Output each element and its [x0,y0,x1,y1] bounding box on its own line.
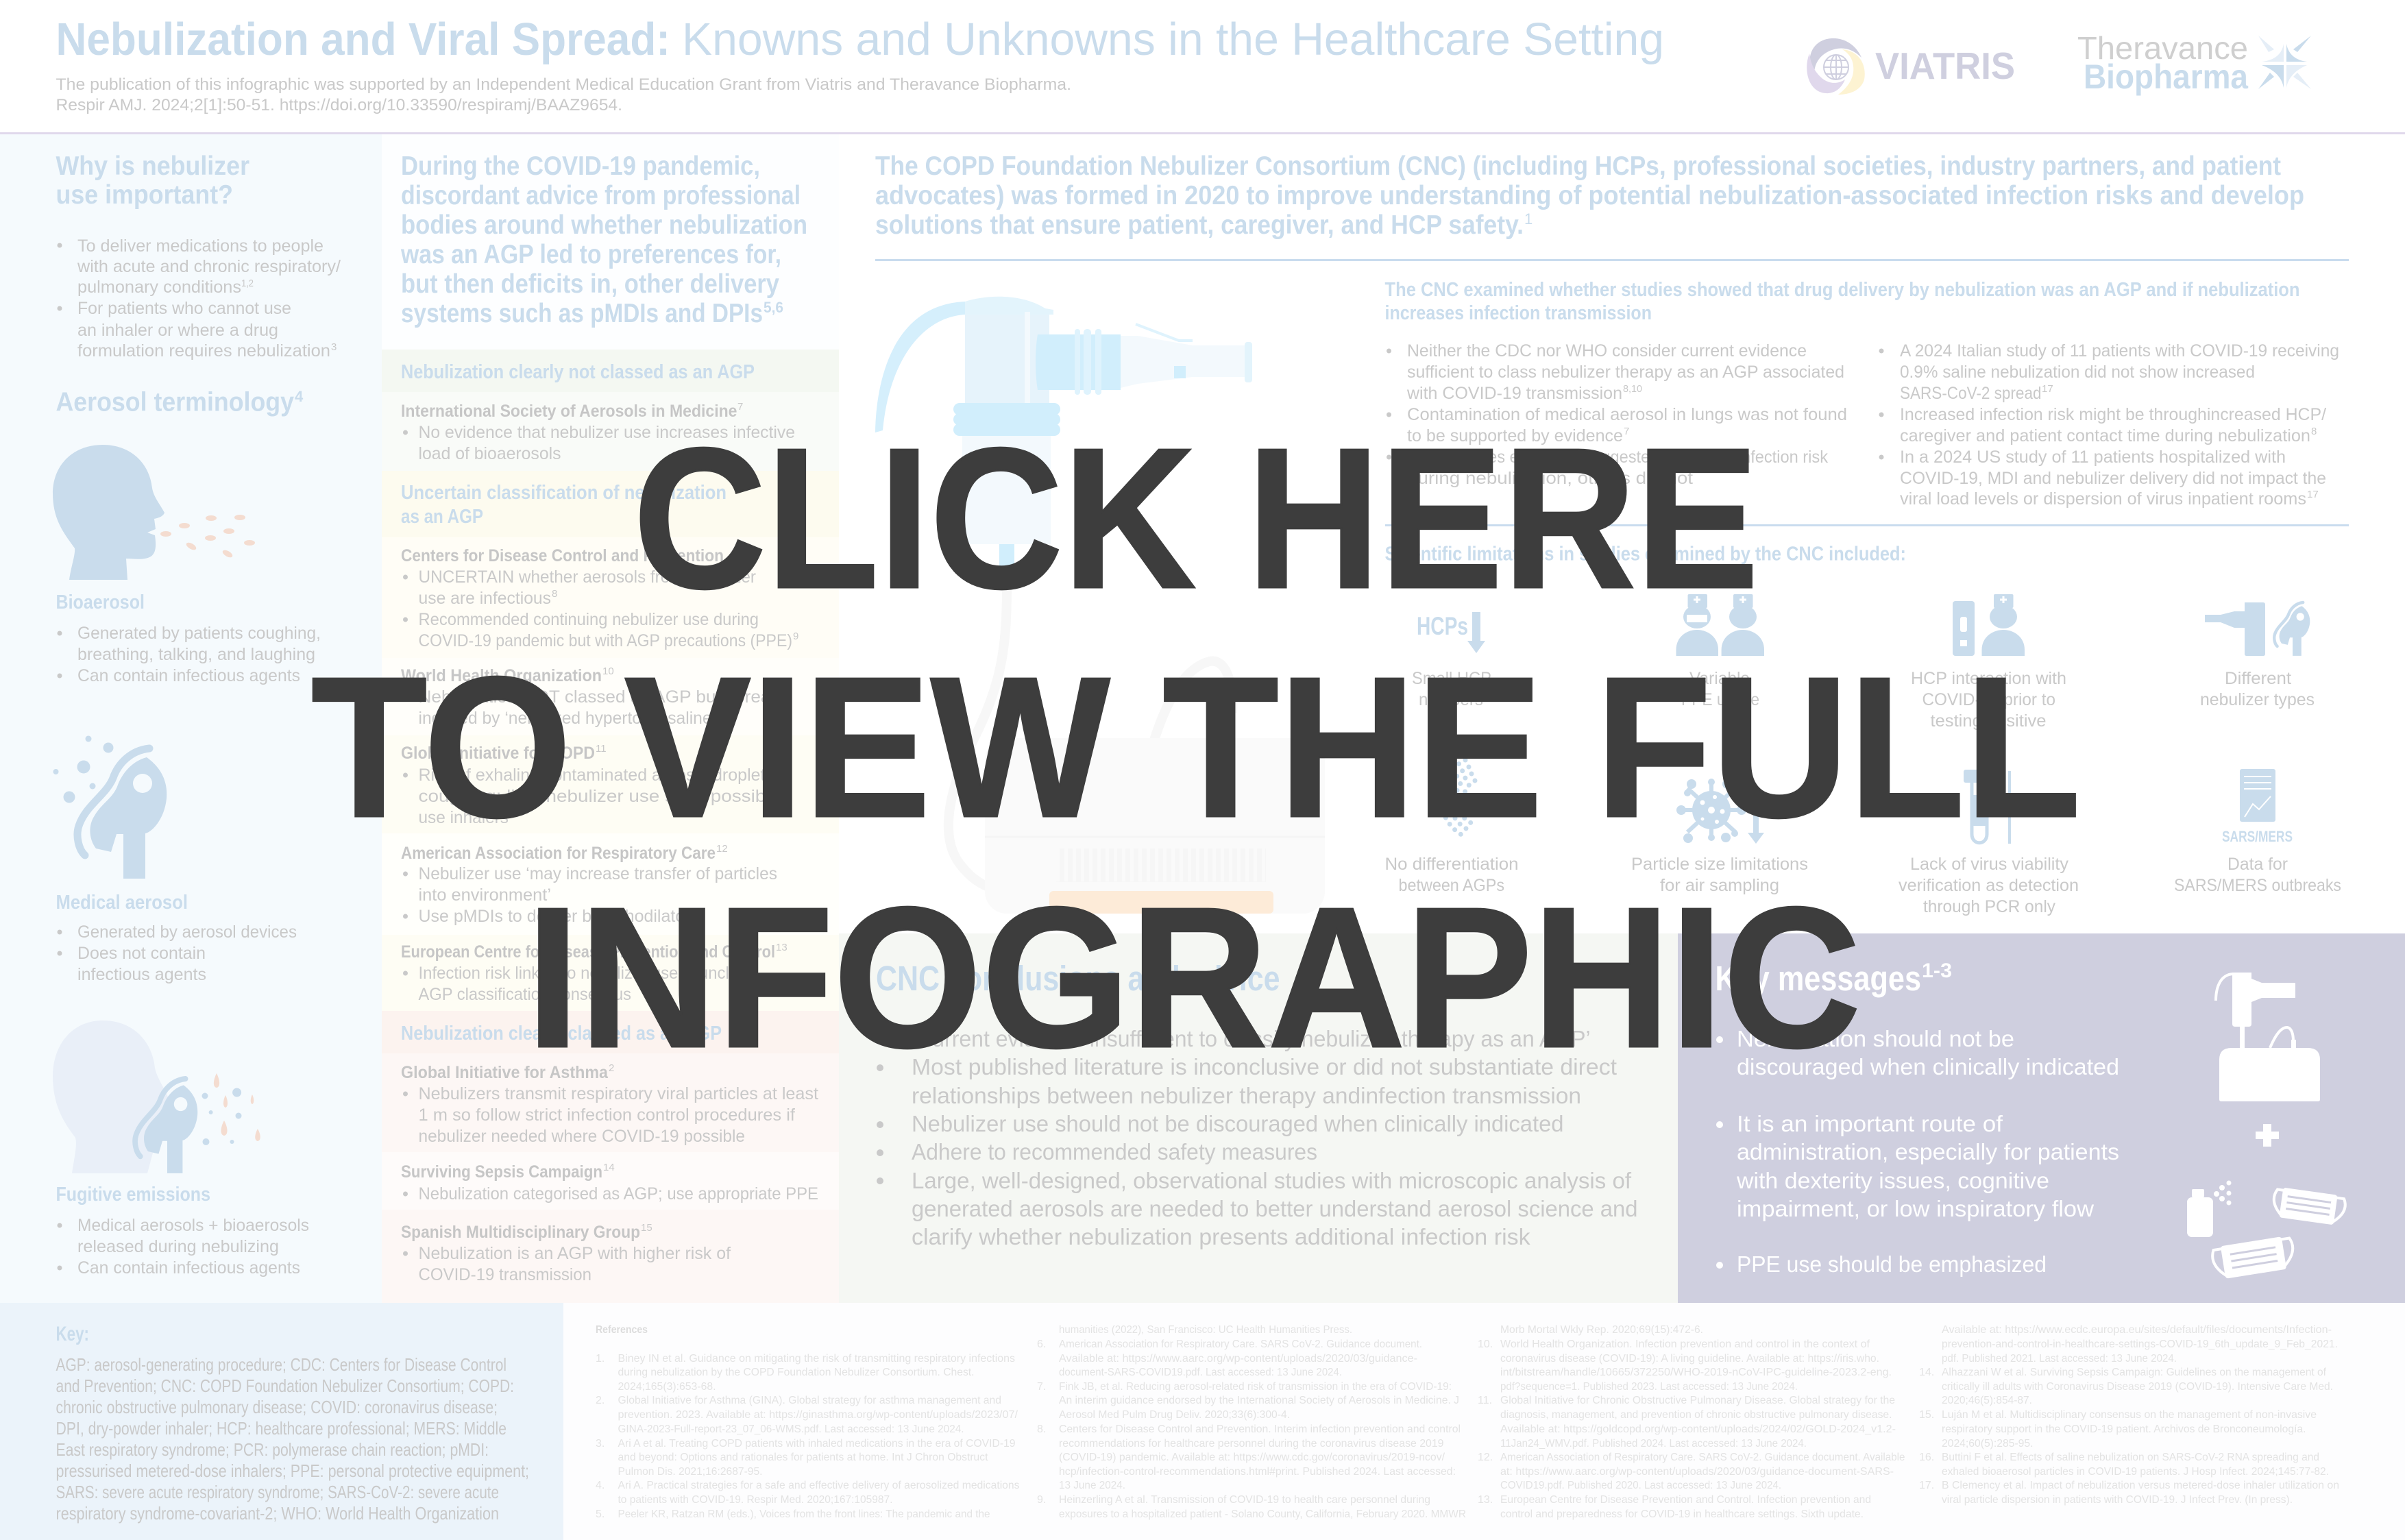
bullets: conclusions: generated aerosols are needed to better understand aerosol science and [912,1196,1638,1221]
section: uncertain classification: Use pMDIs to deliver bronchodilators [418,907,699,926]
bullets: key messages: discouraged when clinically indicated [1737,1054,2119,1079]
subtitle [56,75,1071,114]
bullets: evidence column one: 7 [1624,426,1629,437]
references column two: Fink JB, et al. Reducing aerosol-related risk of transmission in the era of COVID-19: [1059,1381,1452,1393]
bullets: medical aerosol [58,922,297,984]
limitation: lack of virus viability verification [1899,770,2079,916]
section: uncertain classification: 11 [596,743,607,755]
section: uncertain classification: European Centre for Disease Prevention and Control [401,942,775,962]
bullets: evidence column one: Neither the CDC nor WHO consider current evidence [1407,341,1807,360]
limitation: small HCP numbers [1412,612,1491,709]
section: clearly classed as AGP: 1 m so follow strict infection control procedures if [418,1105,795,1125]
references column one: GINA-2023-Full-report-23_07_06-WMS.pdf. Last accessed: 13 June 2024. [618,1423,964,1435]
bullets: evidence column two: In a 2024 US study of 11 patients hospitalized with [1900,448,2286,467]
bullets: evidence column two: caregiver and patient contact time during nebulization [1900,426,2310,445]
references column two: hcp/infection-control-recommendations.html#print. Published 2024. Last accessed: [1059,1466,1456,1478]
limitation: HCP interaction with COVID-19 [1911,594,2066,731]
bullets: evidence column one: with COVID-19 transmission [1406,384,1622,403]
references column four: viral particle dispersion in patients with COVID-19. J Infect Prev. (In press). [1942,1494,2293,1506]
references column one [596,1353,1020,1520]
heading: during the COVID-19 pandemic: was an AGP led to preferences for, [400,240,781,269]
section: clearly classed as AGP: Nebulizers transmit respiratory viral particles at least [418,1084,818,1103]
heading: during the COVID-19 pandemic: but then deficits in, other delivery [401,269,779,299]
bullets: conclusions: Most published literature is inconclusive or did not substantiate direct [912,1054,1617,1079]
references column four: Luján M et al. Multidisciplinary consensus on the management of non-invasive [1942,1409,2317,1421]
section: uncertain classification: coughing; limit nebulizer use so, if possible [418,787,781,806]
abbreviation list: SARS: severe acute respiratory syndrome; SARS-CoV-2: severe acute [56,1482,499,1502]
bullets: why nebulizer [58,236,341,360]
call to action overlay [311,406,2081,1089]
references column four: 15. [1919,1409,1934,1421]
bullets: why nebulizer: formulation requires nebulization [77,341,330,360]
heading: why is nebulizer use important: use important? [56,180,233,210]
references column two: Available at: https://www.aarc.org/wp-content/uploads/2020/03/guidance- [1059,1353,1417,1365]
bullets: evidence column two: 17 [2042,383,2053,395]
bullets: why nebulizer: an inhaler or where a drug [77,321,278,340]
references column three: World Health Organization. Infection prevention and control in the context of [1500,1339,1870,1350]
bullets: bioaerosol: Can contain infectious agents [77,666,300,685]
text: CNC examined AGP evidence: The CNC examined whether studies showed that drug delivery by nebulization was an AGP and if nebulization [1384,279,2300,301]
references column four: prevention-and-control-in-healthcare-settings-COVID-19_6th_update_9_Feb_2021. [1942,1339,2338,1350]
references column two: An interim guidance endorsed by the International Society of Aerosols in Medicine. J [1059,1395,1459,1406]
call to action overlay: INFOGRAPHIC [526,866,1861,1089]
title [56,14,1664,65]
references column two: 9. [1037,1494,1046,1506]
references column two: Heinzerling A et al. Transmission of COVID-19 to health care personnel during [1059,1494,1430,1506]
section: uncertain classification: use are infectious [418,589,551,608]
bullets: evidence column two: 8 [2311,426,2317,437]
section: not classed as AGP: 7 [737,401,743,413]
limitation: no differentiation between AGPs [1384,760,1519,895]
abbreviation list: East respiratory syndrome; PCR: polymerase chain reaction; pMDI: [56,1439,489,1460]
references column one: Pulmon Dis. 2021;16:2687-95. [618,1466,762,1478]
panel: key to abbreviations [0,1303,563,1540]
bullets: conclusions: Large, well-designed, observational studies with microscopic analysis of [912,1168,1632,1193]
limitation: variable PPE usage: Variable [1689,669,1750,688]
section: clearly classed as AGP: Spanish Multidisciplinary Group [401,1223,640,1242]
section: uncertain classification [382,471,839,1011]
text: CNC examined AGP evidence: increases infection transmission [1384,302,1652,324]
limitation: lack of virus viability verification: through PCR only [1923,897,2055,916]
limitation: small HCP numbers: Small HCP [1412,669,1491,688]
label: bioaerosol: Bioaerosol [56,591,145,613]
references column one: Ari A. Practical strategies for a safe and effective delivery of aerosolized medications [618,1480,1020,1491]
heading: why is nebulizer use important: Why is nebulizer [56,151,249,181]
bullets: evidence column two: 0.9% saline nebulization did not show increased [1900,363,2255,382]
heading: COPD Foundation Nebulizer Consortium: 1 [1524,210,1533,228]
panel: left column [0,134,382,1303]
section: uncertain classification: into environment’ [418,885,551,905]
section: uncertain classification: Nebulization NOT classed as AGP but spread [418,687,781,707]
section: not classed as AGP: International Society of Aerosols in Medicine [401,402,737,421]
references column three: diagnosis, management, and prevention of chronic obstructive pulmonary disease. [1500,1409,1892,1421]
references column two: Aerosol Med Pulm Drug Deliv. 2020;33(6):300-4. [1059,1409,1290,1421]
section: uncertain classification: Global Initiative for COPD [401,744,595,763]
references column one: Peeler KR, Ratzan RM (eds.), Voices from the front lines: The pandemic and the [618,1508,990,1520]
heading: COPD Foundation Nebulizer Consortium: The COPD Foundation Nebulizer Consortium (CNC) (including HCPs, professional societies, industry partners, and patient [875,151,2281,181]
references column three: 13. [1478,1494,1493,1506]
bullets: key messages: administration, especially for patients [1737,1139,2119,1164]
section: clearly classed as AGP: Surviving Sepsis Campaign [401,1162,602,1182]
bullets: bioaerosol: breathing, talking, and laughing [77,645,315,664]
references column one: 2. [596,1395,605,1406]
heading: key: Key: [56,1323,89,1345]
references column four: pdf. Published 2021. Last accessed: 13 June 2024. [1942,1353,2177,1365]
heading: during the COVID-19 pandemic: discordant advice from professional [401,181,801,210]
bullets: medical aerosol: infectious agents [77,965,206,984]
section: clearly classed as AGP: nebulizer needed where COVID-19 possible [418,1127,745,1146]
icon: face mask one [2271,1186,2347,1226]
section: clearly classed as AGP: Nebulization categorised as AGP; use appropriate PPE [418,1184,818,1203]
limitation: variable PPE usage [1676,594,1764,709]
logo: Theravance Biopharma: Theravance [2077,30,2248,66]
section: not classed as AGP: No evidence that nebulizer use increases infective [418,423,795,442]
bullets: evidence column one: sufficient to class nebulizer therapy as an AGP associated [1407,363,1844,382]
section: clearly classed as AGP: Nebulization is an AGP with higher risk of [418,1244,731,1263]
heading: scientific limitations: Scientific limitations in studies examined by the CNC included: [1384,543,1906,565]
bullets: evidence column two: Increased infection risk might be throughincreased HCP/ [1900,405,2326,424]
references column one: 2024;165(3):653-68. [618,1381,716,1393]
limitation: data for SARS/MERS outbreaks: SARS/MERS outbreaks [2174,876,2341,895]
references column two: document-SARS-COVID19.pdf. Last accessed: 13 June 2024. [1059,1367,1342,1378]
logo: Viatris [1807,38,2015,95]
bullets: key messages: PPE use should be emphasized [1737,1251,2047,1277]
heading: key messages: 1-3 [1922,960,1952,982]
section: not classed as AGP [382,350,839,471]
limitation: no differentiation between AGPs: No differentiation [1384,855,1519,874]
heading: aerosol terminology: 4 [295,388,304,405]
section: uncertain classification: 10 [602,665,614,677]
bullets: fugitive emissions: Can contain infectious agents [77,1258,300,1278]
abbreviation list: chronic obstructive pulmonary disease; COVID: coronavirus disease; [56,1397,498,1417]
bullets: bioaerosol [58,624,321,685]
bullets: why nebulizer: For patients who cannot use [77,299,291,318]
references column two: 7. [1037,1381,1046,1393]
icon: fugitive emissions head and mask [53,1020,260,1173]
references column two: Centers for Disease Control and Prevention. Interim infection prevention and control [1059,1423,1461,1435]
section: uncertain classification: World Health Organization [401,666,602,685]
bullets: key messages: impairment, or low inspiratory flow [1737,1196,2094,1221]
references column four: 14. [1919,1367,1934,1378]
section: not classed as AGP: load of bioaerosols [418,444,561,463]
bullets: conclusions: relationships between nebulizer therapy andinfection transmission [912,1083,1581,1108]
limitation: HCP interaction with COVID-19: HCP interaction with [1911,669,2066,688]
section: uncertain classification: Nebulizer use ‘may increase transfer of particles [418,864,777,883]
section: clearly classed as AGP: 2 [609,1062,614,1074]
icon: spray bottle [2187,1180,2232,1237]
section: uncertain classification: 9 [793,631,798,642]
section: uncertain classification: as an AGP [401,506,483,528]
abbreviation list [56,1354,529,1524]
references column two: 6. [1037,1339,1046,1350]
limitation: different nebulizer types: Different [2225,669,2291,688]
heading: during the COVID-19 pandemic: systems such as pMDIs and DPIs [401,299,763,328]
heading: aerosol terminology: Aerosol terminology [56,388,294,417]
references column one: to patients with COVID-19. Respir Med. 2020;167:105987. [618,1494,892,1506]
section: clearly classed as AGP: 15 [641,1222,652,1234]
references column four: Alhazzani W et al. Surviving Sepsis Campaign: Guidelines on the management of [1942,1367,2327,1378]
section: uncertain classification: 8 [552,588,557,600]
bullets: evidence column one [1387,341,1847,488]
references column four: B Clemency et al. Impact of nebulization versus metered-dose inhaler utilization on [1942,1480,2339,1491]
title: Knowns and Unknowns in the Healthcare Setting [682,14,1664,65]
bullets: conclusions [877,1026,1638,1249]
limitation: particle size limitations: Particle size limitations [1631,855,1808,874]
abbreviation list: pressurised metered-dose inhalers; PPE: personal protective equipment; [56,1460,529,1481]
section: uncertain classification: Centers for Disease Control and Prevention [401,546,724,565]
references heading: References [596,1324,648,1336]
bullets: evidence column two: 17 [2307,489,2319,500]
references column three: 12. [1478,1452,1493,1463]
references column two: recommendations for healthcare personnel during the coronavirus disease 2019 [1059,1438,1444,1450]
abbreviation list: and Prevention; CNC: COPD Foundation Nebulizer Consortium; COPD: [56,1376,514,1396]
references column two: (COVID-19) pandemic. Available at: https://www.cdc.gov/coronavirus/2019-ncov/ [1059,1452,1445,1463]
panel: CNC findings [875,151,2349,916]
section: uncertain classification: Risk of exhaling contaminated aerosol droplets [418,766,774,785]
limitation: no differentiation between AGPs: between AGPs [1398,876,1504,895]
call to action overlay: TO VIEW THE FULL [311,635,2081,859]
references column three: control and preparedness for COVID-19 in healthcare settings. Sixth update. [1500,1508,1864,1520]
bullets: conclusions: clarify whether nebulization presents additional infection risk [912,1224,1530,1249]
section: clearly classed as AGP: Nebulization clearly classed as an AGP [401,1023,722,1044]
references column two [1037,1324,1466,1520]
limitation: particle size limitations [1631,779,1808,895]
section: uncertain classification: 12 [716,843,728,855]
subtitle: The publication of this infographic was supported by an Independent Medical Education Grant from Viatris and Theravance Biopharma. [56,75,1071,94]
limitation: small HCP numbers: numbers [1419,690,1483,709]
references column three: pdf?sequence=1. Published 2023. Last accessed: 13 June 2024. [1500,1381,1798,1393]
icon: plus [2256,1124,2279,1147]
references column three: European Centre for Disease Prevention and Control. Infection prevention and [1500,1494,1871,1506]
section: uncertain classification: AGP classification consensus [418,985,631,1004]
bullets: evidence column two: SARS-CoV-2 spread [1900,384,2041,403]
references column three: coronavirus disease (COVID-19): A living guideline. Available at: https://iris.who. [1500,1353,1879,1365]
references column two: exposures to a hospitalized patient - Solano County, California, February 2020. MMWR [1059,1508,1466,1520]
illustration: nebulizer machine [875,297,1325,914]
references column two: 8. [1037,1423,1046,1435]
header [0,14,2405,134]
bullets: fugitive emissions [58,1216,309,1278]
references column three: Global Initiative for Chronic Obstructive Pulmonary Disease. Global strategy for the [1500,1395,1895,1406]
references column three: Available at: https://goldcopd.org/wp-content/uploads/2024/02/GOLD-2024_v1.2- [1500,1423,1896,1435]
bullets: why nebulizer: 3 [331,341,337,353]
limitation: variable PPE usage: PPE usage [1681,690,1759,709]
bullets: why nebulizer: To deliver medications to people [77,236,323,256]
limitation: lack of virus viability verification: verification as detection [1899,876,2079,895]
abbreviation list: AGP: aerosol-generating procedure; CDC: Centers for Disease Control [56,1354,506,1375]
references column four: 2020;46(5):854-87. [1942,1395,2032,1406]
section: not classed as AGP: Nebulization clearly not classed as an AGP [401,361,755,383]
bullets: evidence column two: viral load levels or dispersion of virus inpatient rooms [1900,489,2306,509]
references column two: 13 June 2024. [1059,1480,1125,1491]
references column three: 11Jan24_WMV.pdf. Published 2024. Last accessed: 13 June 2024. [1500,1438,1807,1450]
references column one: 1. [596,1353,605,1365]
references column three: Morb Mortal Wkly Rep. 2020;69(15):472-6. [1500,1324,1703,1336]
references column three [1478,1324,1905,1520]
section: uncertain classification: UNCERTAIN whether aerosols from nebulizer [418,567,756,587]
bullets: evidence column one: Some studies examined suggested increased infection risk [1407,448,1828,467]
references column three: 11. [1478,1395,1492,1406]
text: CNC examined AGP evidence [1384,279,2339,509]
references column three: int/bitstream/handle/10665/372250/WHO-2019-nCoV-IPC-guideline-2023.2-eng. [1500,1367,1892,1378]
abbreviation list: respiratory syndrome-covariant-2; WHO: World Health Organization [56,1503,499,1524]
references column three: 10. [1478,1339,1493,1350]
references column four: Available at: https://www.ecdc.europa.eu/sites/default/files/documents/Infection- [1942,1324,2332,1336]
panel: key messages [1678,933,2405,1303]
bullets: medical aerosol: Generated by aerosol devices [77,922,297,942]
references column one: Ari A et al. Treating COPD patients with inhaled medications in the era of COVID-19 [618,1438,1016,1450]
references column two: American Association for Respiratory Care. SARS CoV-2. Guidance document. [1059,1339,1422,1350]
section: clearly classed as AGP: 14 [603,1162,615,1173]
panel: CNC conclusions and advice [839,933,1678,1303]
section: uncertain classification: American Association for Respiratory Care [401,844,716,863]
limitation: HCP interaction with COVID-19: testing positive [1930,711,2047,731]
bullets: key messages [1716,1026,2119,1277]
references column one: during nebulization by the COPD Foundation Nebulizer Consortium. Chest. [618,1367,975,1378]
section: uncertain classification: Recommended continuing nebulizer use during [418,610,759,629]
section: uncertain classification: 13 [776,942,788,953]
heading: during the COVID-19 pandemic: During the COVID-19 pandemic, [401,151,760,181]
references column two: humanities (2022), San Francisco: UC Health Humanities Press. [1059,1324,1352,1336]
heading: why is nebulizer use important [56,151,249,210]
references column one: Biney IN et al. Guidance on mitigating the risk of transmitting respiratory infections [618,1353,1015,1365]
bullets: evidence column two: A 2024 Italian study of 11 patients with COVID-19 receiving [1900,341,2339,360]
references column one: Global Initiative for Asthma (GINA). Global strategy for asthma management and [618,1395,1001,1406]
bullets: medical aerosol: Does not contain [77,944,206,963]
label: medical aerosol: Medical aerosol [56,892,188,914]
section: uncertain classification: induced by ‘nebulized hypertonic saline’ [418,709,716,728]
call to action overlay: CLICK HERE [633,406,1759,630]
title: Nebulization and Viral Spread: [56,14,670,65]
references column one: 4. [596,1480,605,1491]
bullets: evidence column one: during nebulization, others did not [1407,469,1693,488]
section: uncertain classification: COVID-19 pandemic but with AGP precautions (PPE) [418,631,792,650]
references column one: 5. [596,1508,605,1520]
panel: references [563,1303,2405,1540]
bullets: key messages: Nebulization should not be [1737,1026,2014,1051]
icon: head exhaling bioaerosol [53,445,255,580]
limitation: data for SARS/MERS outbreaks: SARS/MERS [2222,828,2293,845]
references column four: 17. [1919,1480,1934,1491]
heading: key messages: Key messages [1715,959,1921,998]
bullets: conclusions: ‘Current evidence insufficient to classify nebulized therapy as an AGP’ [912,1026,1591,1051]
bullets: evidence column one: to be supported by evidence [1407,426,1623,445]
references column one: 3. [596,1438,605,1450]
references column four: 16. [1919,1452,1934,1463]
heading: COPD Foundation Nebulizer Consortium: solutions that ensure patient, caregiver, and HCP safety. [875,210,1524,240]
section: uncertain classification: Infection risk linked to nebulizer use is unclear; [418,964,757,983]
bullets: fugitive emissions: Medical aerosols + bioaerosols [77,1216,309,1235]
references column three: at: https://www.aarc.org/wp-content/uploads/2020/03/guidance-document-SARS- [1500,1466,1894,1478]
heading: during the COVID-19 pandemic: bodies around whether nebulization [401,210,807,240]
references column three: American Association of Respiratory Care. SARS CoV-2. Guidance document. Available [1500,1452,1905,1463]
bullets: evidence column two: COVID-19, MDI and nebulizer delivery did not impact the [1900,469,2326,488]
references column three: COVID19.pdf. Published 2020. Last accessed: 13 June 2024. [1500,1480,1781,1491]
bullets: why nebulizer: with acute and chronic respiratory/ [77,257,341,276]
limitation: lack of virus viability verification: Lack of virus viability [1910,855,2069,874]
heading: during the COVID-19 pandemic: 5,6 [764,299,783,316]
section: clearly classed as AGP: Global Initiative for Asthma [401,1063,609,1082]
section: clearly classed as AGP: COVID-19 transmission [418,1265,591,1284]
references column one: and beyond: Options and rationales for patients at home. Int J Chron Obstruct [618,1452,988,1463]
logo: Viatris: VIATRIS [1875,45,2015,87]
references column four: 2024;60(5):285-95. [1942,1438,2033,1450]
logo: Theravance Biopharma: Biopharma [2084,58,2249,96]
references column four [1919,1324,2339,1506]
limitation: particle size limitations: for air sampling [1660,876,1779,895]
bullets: key messages: with dexterity issues, cognitive [1736,1168,2049,1193]
abbreviation list: DPI, dry-powder inhaler; HCP: healthcare professional; MERS: Middle [56,1418,506,1439]
limitation: data for SARS/MERS outbreaks: Data for [2227,855,2288,874]
bullets: why nebulizer: 1,2 [241,278,254,289]
bullets: evidence column one: 8,10 [1623,383,1642,395]
section: uncertain classification: use inhalers [418,808,509,827]
icon: nebulizer machine white [2216,973,2320,1101]
bullets: conclusions: Adhere to recommended safety measures [912,1139,1317,1164]
bullets: conclusions: Nebulizer use should not be discouraged when clinically indicated [912,1111,1564,1136]
bullets: key messages: It is an important route of [1737,1111,2003,1136]
bullets: fugitive emissions: released during nebulizing [77,1237,279,1256]
references column four: exhaled bioaerosol particles in COVID-19 patients. J Hosp Infect. 2024;145:77-82. [1942,1466,2329,1478]
references column one: prevention. 2023. Available at: https://ginasthma.org/wp-content/uploads/2023/07/ [618,1409,1018,1421]
limitation: HCP interaction with COVID-19: COVID-19 prior to [1922,690,2055,709]
references column four: Buttini F et al. Effects of saline nebulization on SARS-CoV-2 RNA spreading and [1942,1452,2319,1463]
bullets: evidence column two [1879,341,2339,509]
limitation: different nebulizer types [2200,602,2315,709]
label: fugitive emissions: Fugitive emissions [56,1184,210,1206]
bullets: why nebulizer: pulmonary conditions [77,278,241,297]
heading: COPD Foundation Nebulizer Consortium [875,151,2304,240]
icon: face mask two [2211,1235,2296,1280]
bullets: bioaerosol: Generated by patients coughing, [77,624,321,643]
subtitle: Respir AMJ. 2024;2[1]:50-51. https://doi.org/10.33590/respiramj/BAAZ9654. [56,96,622,114]
section: clearly classed as AGP [382,1011,839,1303]
limitation: data for SARS/MERS outbreaks [2174,769,2341,895]
heading: COPD Foundation Nebulizer Consortium: advocates) was formed in 2020 to improve understanding of potential nebulization-associated infection risks and develop [875,181,2304,210]
references column four: critically ill adults with Coronavirus Disease 2019 (COVID-19). Intensive Care Med. [1942,1381,2333,1393]
section: uncertain classification: Uncertain classification of nebulization [401,482,727,504]
panel: professional body advice [382,134,839,1303]
limitation: small HCP numbers: HCPs [1417,612,1468,640]
heading: conclusions: CNC conclusions and advice [876,959,1280,998]
bullets: evidence column one: Contamination of medical aerosol in lungs was not found [1407,405,1847,424]
logo: Theravance Biopharma [2077,30,2311,96]
heading: during the COVID-19 pandemic [400,151,807,328]
limitation: different nebulizer types: nebulizer types [2200,690,2315,709]
references column four: respiratory support in the COVID-19 patient. Archivos de Bronconeumología. [1942,1423,2306,1435]
icon: medical aerosol mask [53,736,167,879]
